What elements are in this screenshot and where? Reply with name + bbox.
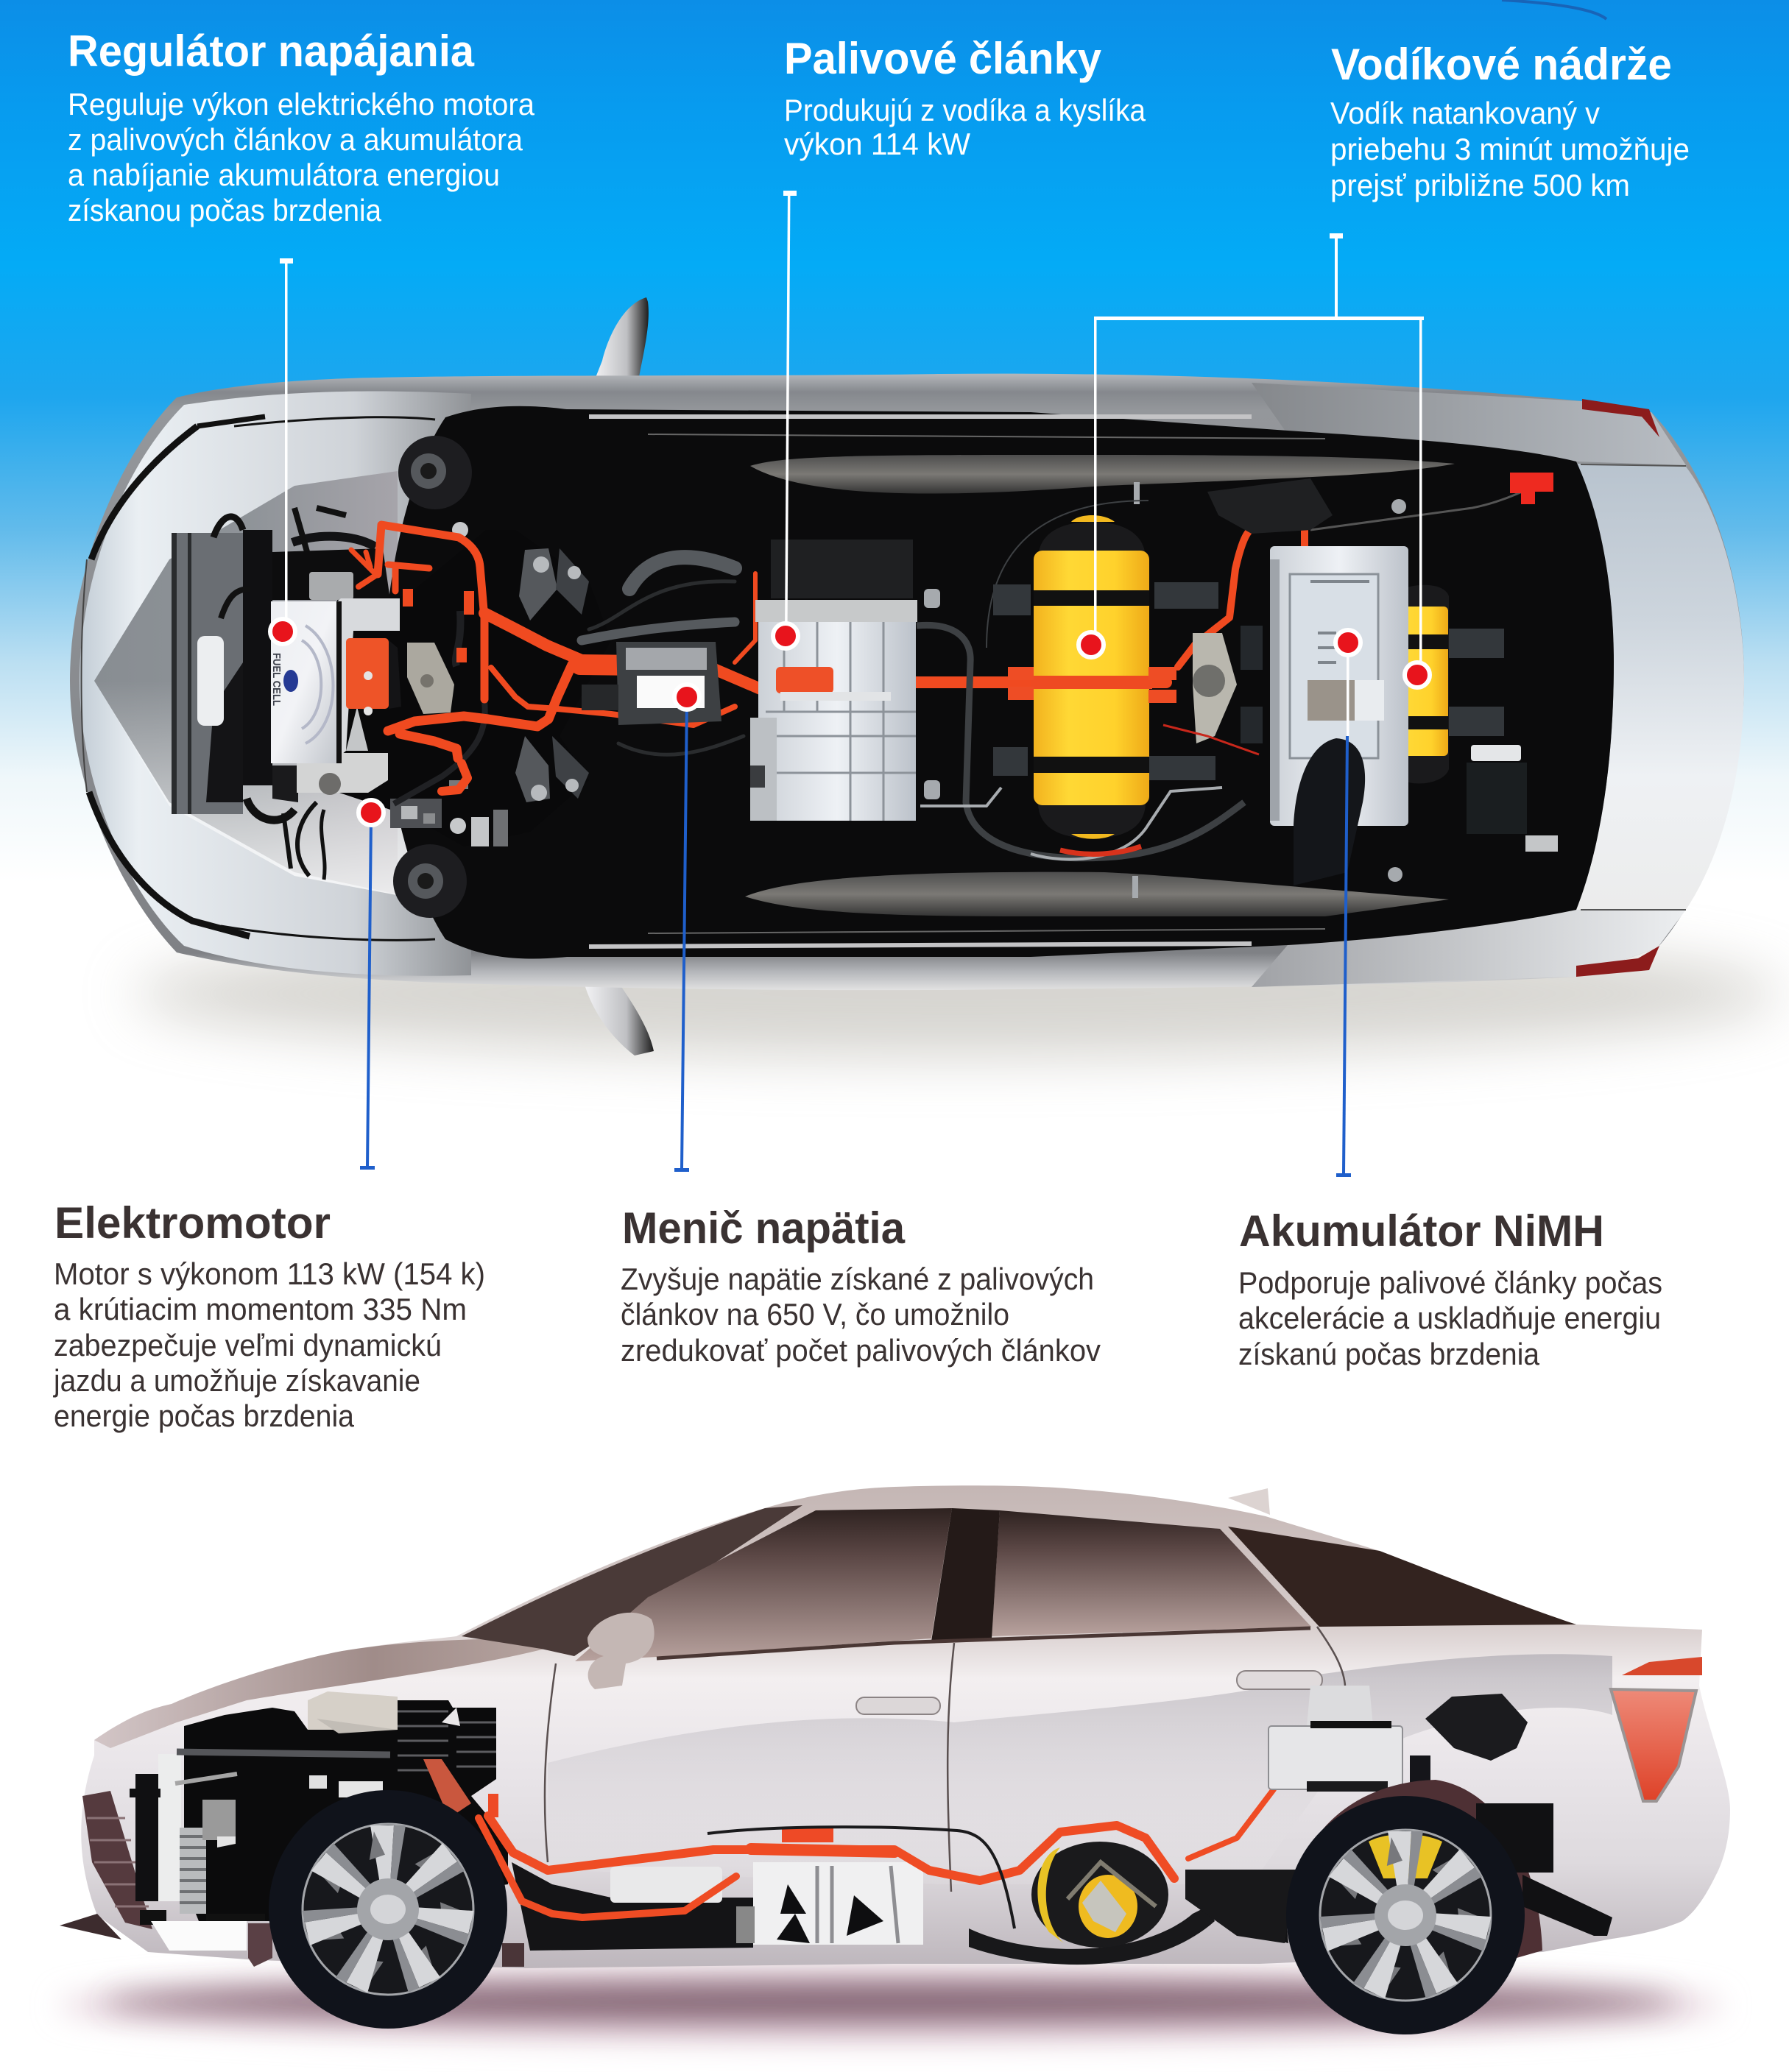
black chassis interior — [384, 406, 1614, 959]
text block: Akumulátor NiMH: Akumulátor NiMH — [1239, 1206, 1604, 1256]
front mechanical compartment — [130, 1691, 508, 1951]
icon: upper tail light — [1622, 1657, 1702, 1675]
car body shell — [70, 374, 1744, 990]
upper floor sill — [750, 455, 1455, 494]
rear suspension beam — [1522, 1875, 1612, 1936]
orange high-voltage cabling — [351, 525, 1305, 791]
text block: Vodíkové nádrže: prejsť približne 500 km — [1330, 168, 1630, 202]
text block: Akumulátor NiMH: získanú počas brzdenia — [1238, 1337, 1540, 1371]
battery pack side — [1268, 1686, 1402, 1792]
text block: Elektromotor: jazdu a umožňuje získavanie — [52, 1363, 420, 1398]
marker: fuel cells — [773, 623, 798, 648]
NiMH battery pack — [1270, 546, 1408, 885]
text block: Menič napätia: Zvyšuje napätie získané z palivových — [621, 1262, 1094, 1296]
leader: regulator — [280, 258, 293, 627]
text block: Vodíkové nádrže: Vodík natankovaný v — [1330, 96, 1600, 130]
engine bay mechanicals — [297, 522, 611, 846]
front wheel arch flap — [248, 1923, 272, 1967]
small dark arc at top edge — [1502, 0, 1606, 19]
text block: Elektromotor: Elektromotor — [54, 1198, 331, 1248]
grille slats — [87, 1818, 149, 1906]
top-down car cutaway — [70, 297, 1782, 1056]
windshield — [462, 1505, 802, 1656]
text block: Elektromotor: zabezpečuje veľmi dynamickú — [54, 1328, 442, 1362]
text block: Regulátor napájania: Regulátor napájania — [68, 26, 475, 76]
text block: Elektromotor: a krútiacim momentom 335 Nm — [54, 1292, 467, 1326]
text block: Regulátor napájania: získanou počas brzdenia — [68, 193, 382, 227]
red marker dots — [270, 619, 1430, 825]
fuel cell stack side — [736, 1862, 923, 1945]
valve assembly between tanks — [1163, 626, 1263, 754]
voltage converter cylinder — [610, 1867, 722, 1903]
lower floor sill — [745, 872, 1449, 916]
marker: battery — [1335, 630, 1361, 655]
lower door crease shading — [548, 1654, 1612, 1884]
marker: large tank — [1079, 632, 1104, 657]
suspension tower lower — [393, 844, 467, 918]
fade on lower compartment floor — [94, 681, 412, 898]
orange connectors — [403, 589, 474, 662]
fuel cell stack unit — [750, 540, 917, 821]
door seams — [545, 1627, 1345, 1892]
icon: upper tail light — [1582, 399, 1659, 437]
suspension tower upper — [398, 436, 472, 509]
car body — [81, 1485, 1730, 1968]
text block: Palivové články: Produkujú z vodíka a kyslíka — [784, 93, 1146, 127]
text block: Regulátor napájania: Reguluje výkon elektrického motora — [68, 87, 535, 121]
marker: motor — [359, 800, 384, 825]
text block: Elektromotor: energie počas brzdenia — [54, 1399, 355, 1433]
icon: rear door handle — [1237, 1671, 1322, 1689]
red service connector — [1510, 473, 1553, 504]
chassis underside — [502, 1862, 1288, 1967]
power regulator unit: FUEL CELL — [270, 653, 283, 706]
large hydrogen tank — [1031, 515, 1152, 854]
text block: Akumulátor NiMH — [1238, 1206, 1662, 1371]
power regulator unit — [270, 601, 342, 763]
text block: Elektromotor — [52, 1198, 485, 1433]
small bolts and fittings — [924, 482, 1406, 898]
leader: motor — [360, 817, 375, 1170]
leader: fuel cells — [783, 191, 797, 633]
text block: Palivové články — [784, 34, 1146, 161]
ground shadow pale halo — [59, 1969, 1723, 2043]
grey front compartment floor — [94, 471, 398, 894]
rear door window — [992, 1510, 1311, 1636]
icon: lower tail light — [1576, 946, 1659, 977]
text block: Palivové články: výkon 114 kW — [784, 127, 970, 161]
text block: Vodíkové nádrže: Vodíkové nádrže — [1331, 40, 1672, 89]
orange cables side view — [479, 1789, 1274, 1917]
rear right fittings — [1467, 745, 1558, 852]
plumbing around tanks — [917, 482, 1546, 859]
rear lower body band — [1252, 910, 1686, 987]
front door window — [575, 1508, 952, 1661]
mounting brackets — [993, 582, 1504, 780]
small hydrogen tank — [1391, 585, 1449, 784]
text block: Palivové články: Palivové články — [784, 34, 1102, 83]
rear under fittings — [1185, 1870, 1296, 1943]
translucent hood — [80, 391, 471, 976]
fuel filler module — [1425, 1694, 1528, 1761]
text block: Menič napätia: Menič napätia — [622, 1203, 906, 1253]
spoiler fin — [1228, 1488, 1270, 1515]
window pillar — [931, 1508, 1000, 1641]
text block: Regulátor napájania — [68, 26, 535, 227]
rear quarter glass — [1228, 1527, 1576, 1627]
lower front lip — [60, 1914, 121, 1940]
car ground shadow — [133, 931, 1782, 1056]
icon: side mirror — [587, 1613, 654, 1689]
rear shock absorber — [1410, 1755, 1430, 1822]
front wheel — [269, 1790, 507, 2029]
rear upper dark mount — [1207, 478, 1333, 534]
marker: voltage converter — [674, 685, 699, 710]
rear upper body band — [1252, 383, 1686, 465]
leader: voltage converter — [674, 699, 689, 1172]
thin black cable — [708, 1827, 1015, 1928]
12 V battery — [1476, 1803, 1553, 1873]
orange engine power block — [346, 638, 401, 715]
text block: Regulátor napájania: a nabíjanie akumulátora energiou — [68, 158, 500, 192]
side-view car cutaway — [59, 1485, 1730, 2043]
text block: Vodíkové nádrže: priebehu 3 minút umožňuje — [1330, 132, 1690, 166]
icon: upper side mirror — [591, 297, 649, 389]
rear wheel — [1286, 1796, 1525, 2034]
front grille — [82, 1791, 152, 1929]
icon: front door handle — [856, 1697, 940, 1714]
ground shadow — [103, 1983, 1679, 2021]
text block: Elektromotor: Motor s výkonom 113 kW (154 k) — [54, 1256, 485, 1291]
hood panel — [94, 1638, 560, 1748]
text block: Menič napätia: zredukovať počet palivových článkov — [621, 1333, 1101, 1368]
text block: Menič napätia — [621, 1203, 1101, 1368]
leader: hydrogen tanks — [1094, 233, 1424, 670]
hydrogen tank side view — [1031, 1842, 1168, 1948]
hood edge lines and headlights — [81, 417, 435, 940]
leader lines — [280, 191, 1424, 1177]
coolant pipes — [582, 557, 744, 754]
trunk lid — [1576, 464, 1744, 910]
rear wheel arch — [1296, 1780, 1542, 1958]
icon: lower side mirror — [582, 972, 654, 1056]
blue background gradient — [0, 0, 1789, 883]
orange junction block — [488, 1794, 498, 1817]
sill highlights — [589, 417, 1686, 947]
text block: Akumulátor NiMH: Podporuje palivové články počas — [1238, 1265, 1662, 1300]
orange tank connectors — [1008, 667, 1176, 703]
leader: battery — [1336, 644, 1351, 1177]
icon: main tail light — [1611, 1689, 1696, 1801]
marker: small tank — [1405, 662, 1430, 687]
front compartment radiator and plumbing — [172, 508, 390, 880]
text block: Akumulátor NiMH: akcelerácie a uskladňuje energiu — [1238, 1301, 1661, 1335]
orange junction bar — [782, 1828, 833, 1842]
DC voltage converter unit — [582, 642, 721, 725]
marker: regulator — [270, 619, 295, 644]
text block: Vodíkové nádrže — [1330, 40, 1690, 202]
text block: Menič napätia: článkov na 650 V, čo umožnilo — [621, 1297, 1009, 1332]
text block: Regulátor napájania: z palivových článkov a akumulátora — [68, 122, 523, 157]
